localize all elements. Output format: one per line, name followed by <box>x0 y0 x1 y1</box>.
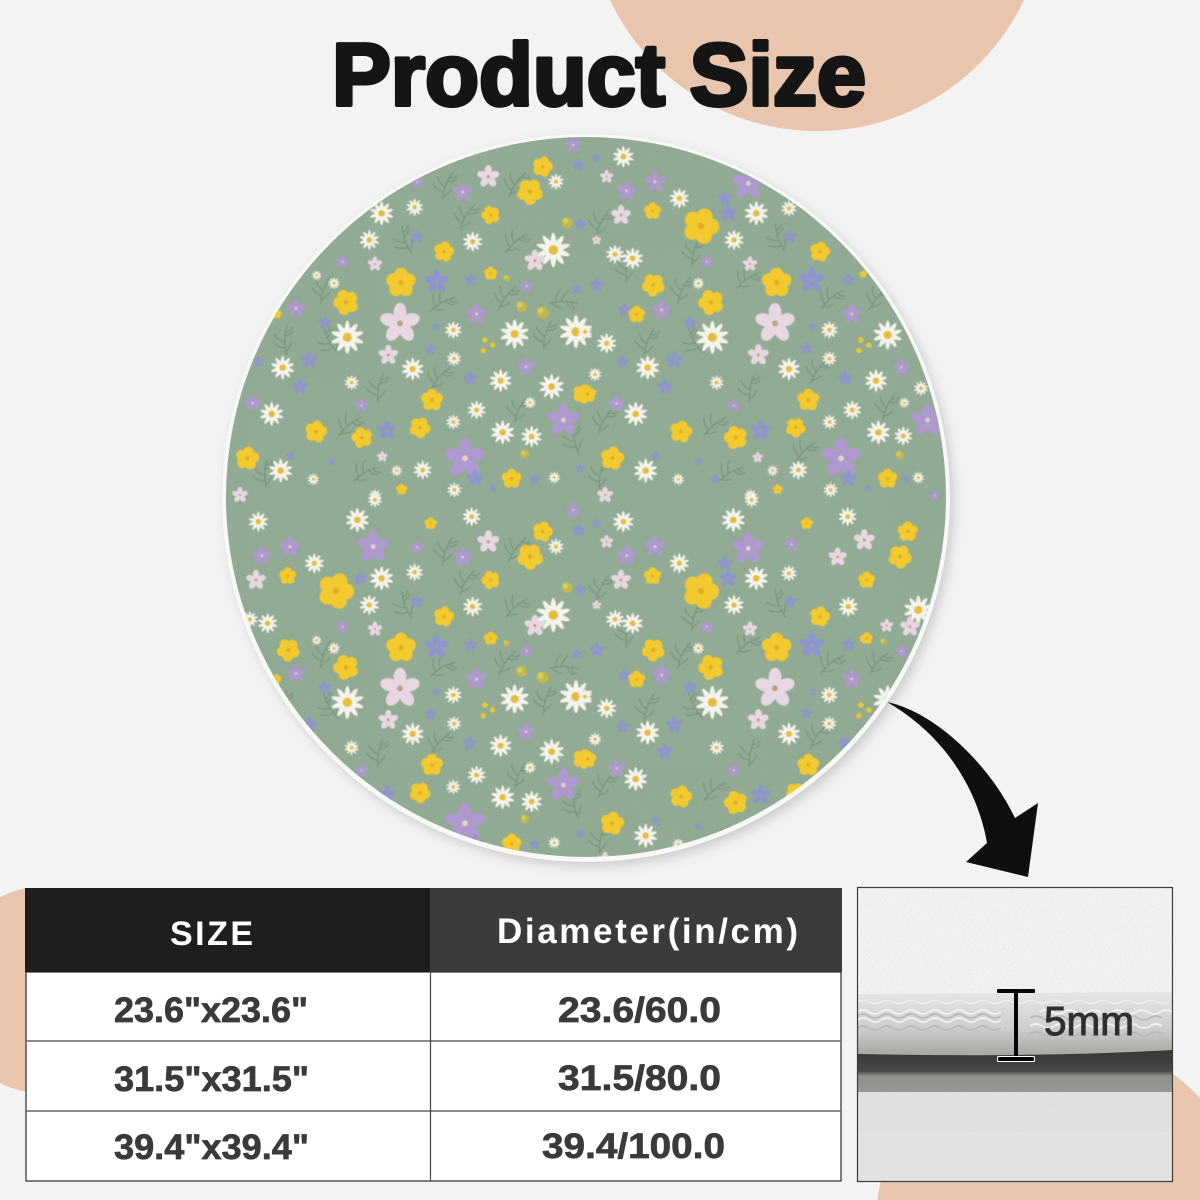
row: 23.6 inch: 23.6"x23.6" <box>114 991 308 1030</box>
header: size column <box>25 888 430 972</box>
row: 31.5 inch: 31.5/80.0 <box>558 1059 721 1098</box>
size table <box>25 888 842 1181</box>
decorative peach shape: top right <box>610 0 1024 131</box>
row: 31.5 inch: 31.5"x31.5" <box>114 1060 309 1099</box>
decorative peach shape: left <box>0 888 27 1092</box>
thickness measure bracket <box>997 989 1035 1062</box>
row: 23.6 inch: 23.6/60.0 <box>558 991 721 1030</box>
header: diameter column: Diameter(in/cm) <box>497 912 798 951</box>
row: 23.6 inch <box>114 991 721 1030</box>
arrow pointing from rug edge to thickness photo <box>887 702 1038 877</box>
row: 39.4 inch: 39.4/100.0 <box>542 1127 725 1166</box>
header: size column: SIZE <box>170 915 253 953</box>
title: Product Size <box>332 25 866 124</box>
thickness close-up photo panel <box>857 887 1173 1182</box>
thickness label: 5mm <box>1044 998 1134 1044</box>
decorative peach shape: bottom right <box>877 1037 1200 1200</box>
row: 39.4 inch: 39.4"x39.4" <box>114 1128 309 1167</box>
row: 39.4 inch <box>114 1127 725 1167</box>
round floral rug product image <box>222 134 953 868</box>
row: 31.5 inch <box>114 1059 721 1099</box>
table body <box>26 972 841 1181</box>
header: diameter column <box>430 888 842 972</box>
